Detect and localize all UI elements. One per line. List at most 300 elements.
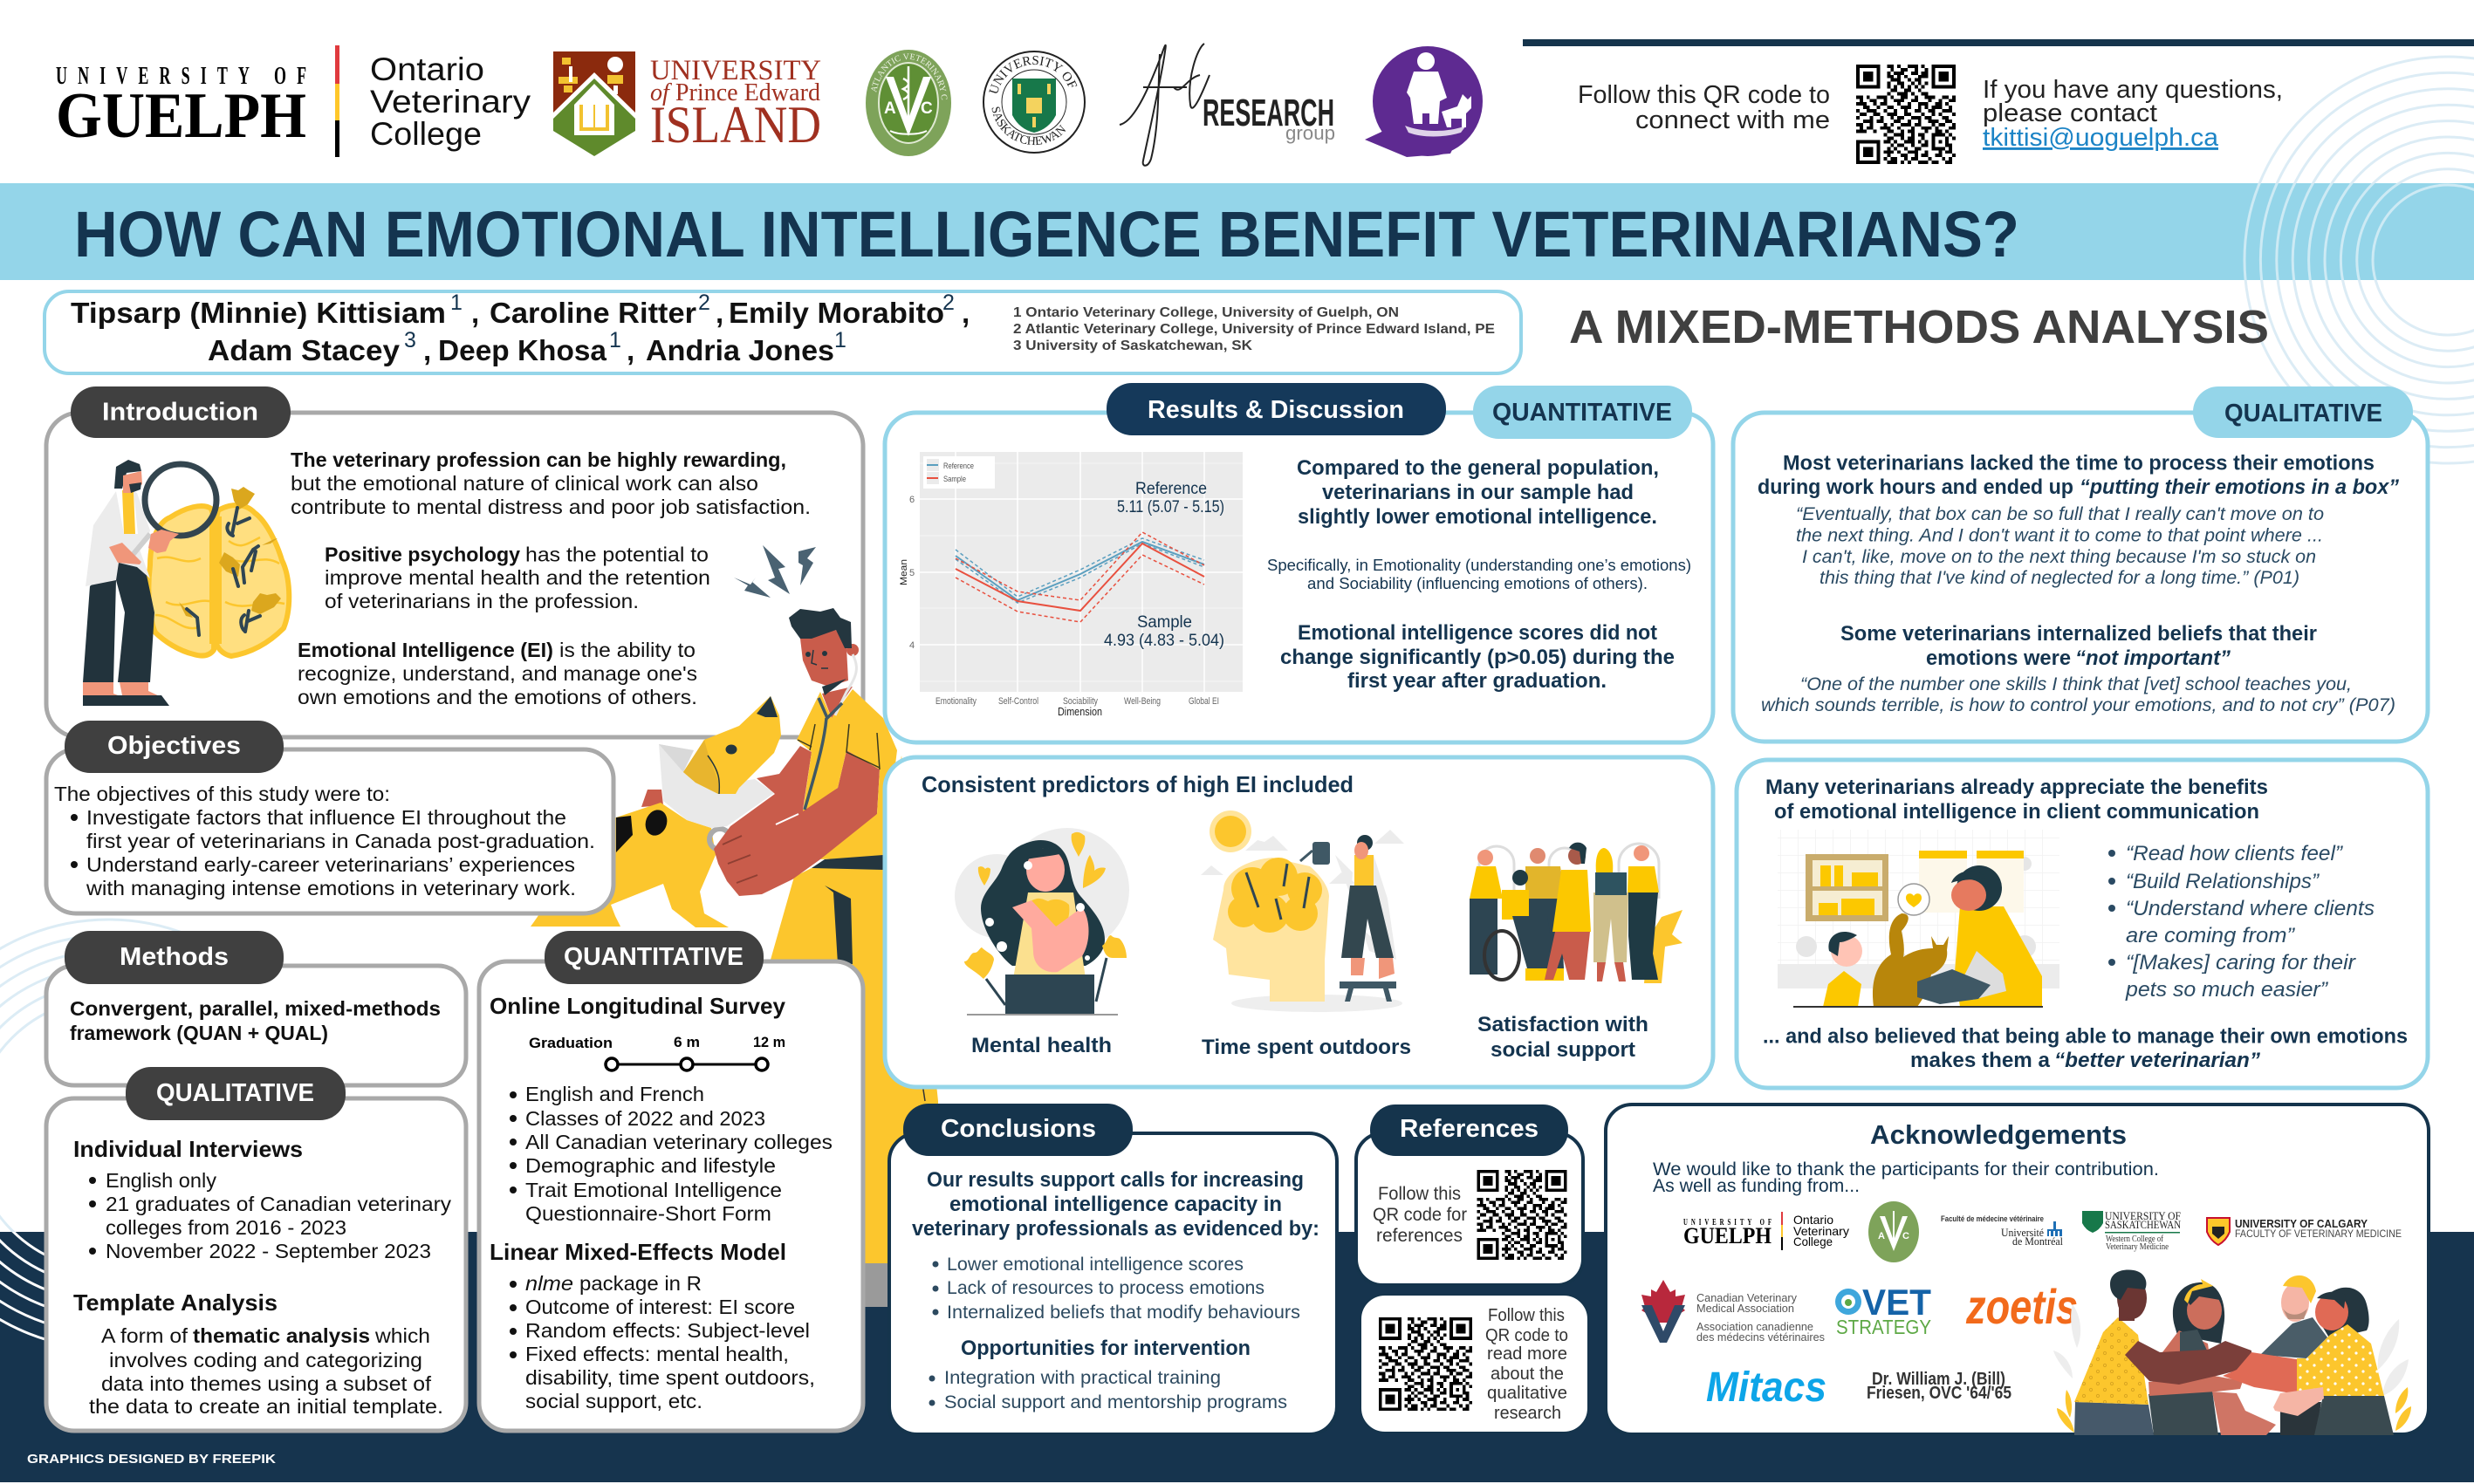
header: logo University of Saskatchewan: SASKATCHEWAN — [991, 106, 1066, 145]
logo: Université de Montréal: de Montréal — [2012, 1234, 2063, 1248]
logo: Université de Montréal: Faculté de médecine vétérinaire — [1941, 1214, 2044, 1223]
panel: methods — [46, 931, 466, 1085]
author names — [71, 291, 970, 366]
tag: qualitative — [2193, 386, 2413, 438]
logo: zoetis: zoetis — [1965, 1279, 2078, 1334]
neck and arm skin — [822, 687, 853, 718]
finding: putting emotions in a box: Most veterinarians lacked the time to process their emotions — [1783, 452, 2375, 475]
heading: consistent predictors: Consistent predictors of high EI included — [922, 771, 1354, 797]
chart axes: Global EI — [1189, 696, 1219, 707]
text: qualitative QR prompt: read more — [1487, 1344, 1567, 1364]
label: satisfaction with social support: social support — [1491, 1038, 1635, 1062]
heading: methods — [65, 931, 284, 984]
heading: client communication: Many veterinarians already appreciate the benefits — [1765, 776, 2268, 799]
heading: methods: Methods — [120, 943, 229, 971]
QR code: references — [1477, 1170, 1567, 1260]
finding: not important — [1840, 622, 2317, 670]
logo: Saskatchewan WCVM: SASKATCHEWAN — [2105, 1218, 2182, 1231]
flowers — [179, 487, 281, 618]
navy footer band — [0, 1232, 2474, 1482]
timeline: graduation to 12 months — [529, 1034, 785, 1070]
heading: results and discussion — [1107, 383, 1446, 435]
chart axes: Emotionality — [935, 696, 977, 707]
text: objectives: Understand early-career veterinarians’ experiences — [86, 853, 575, 876]
background leaves — [2053, 1304, 2409, 1396]
person one — [2074, 1402, 2154, 1435]
text: thanks: We would like to thank the participants for their contribution. — [1653, 1159, 2159, 1180]
QR prompt text: Follow this QR code to — [1578, 81, 1830, 109]
dog body — [531, 803, 729, 927]
list: client quotes: “Understand where clients — [2126, 897, 2375, 920]
text: conclusions summary: Our results support calls for increasing — [927, 1168, 1304, 1192]
text: template analysis: the data to create an initial template. — [89, 1395, 443, 1418]
illustration: team with joined hands — [2053, 1270, 2411, 1435]
logo: Guelph OVC: College — [1793, 1234, 1833, 1248]
heading: objectives: Objectives — [107, 732, 241, 760]
list: client quotes — [2108, 842, 2375, 1002]
text: template analysis: data into themes using a subset of — [101, 1372, 432, 1395]
heading: client communication: of emotional intelligence in client communication — [1774, 800, 2259, 824]
panel: predictors of EI — [885, 757, 1713, 1087]
logo: CVMA: des médecins vétérinaires — [1696, 1330, 1825, 1344]
text: thanks — [1653, 1159, 2159, 1196]
list: survey details: English and French — [525, 1083, 704, 1105]
text: individual interviews — [73, 1136, 452, 1262]
QR prompt text: connect with me — [1635, 106, 1830, 134]
header: logo University of Guelph Ontario Veterinary College — [56, 45, 531, 157]
text: methods framework: Convergent, parallel, mixed-methods — [70, 997, 441, 1020]
stress bolts — [734, 545, 816, 598]
header: logo University of Saskatchewan — [983, 51, 1086, 154]
heading: objectives — [65, 721, 284, 773]
brain — [148, 505, 289, 656]
text: qualitative QR prompt: Follow this — [1488, 1306, 1565, 1325]
heading: conclusions — [903, 1104, 1133, 1156]
panel: conclusions — [889, 1104, 1337, 1434]
arms — [2125, 1341, 2251, 1385]
author names: 1 — [834, 328, 846, 352]
text: references QR prompt — [1373, 1184, 1467, 1246]
header: logo University of Guelph Ontario Veterinary College: Ontario — [370, 51, 484, 87]
header: logo AVC crest: A — [884, 99, 896, 118]
chart legend — [923, 456, 995, 489]
list: survey details: Questionnaire-Short Form — [525, 1202, 771, 1225]
text: introduction: but the emotional nature of clinical work can also — [291, 472, 758, 495]
finding: better veterinarian: makes them a — [1910, 1049, 2051, 1072]
icon: head growing flowers with watering woman — [1201, 810, 1404, 1012]
text: quantitative findings: slightly lower emotional intelligence. — [1298, 505, 1657, 529]
finding: better veterinarian — [1763, 1024, 2408, 1072]
text: quantitative findings: veterinarians in our sample had — [1322, 481, 1634, 504]
text: methods framework: framework (QUAN + QUAL) — [70, 1022, 328, 1044]
chart annotations: 4.93 (4.83 - 5.04) — [1104, 632, 1224, 650]
quote: P01: “Eventually, that box can be so full that I really can't move on to — [1796, 504, 2324, 524]
header: logo UPEI: UNIVERSITY — [650, 55, 821, 86]
logo: Université de Montréal — [1941, 1214, 2063, 1248]
header: logo University of Guelph Ontario Veterinary College: Veterinary — [370, 84, 531, 120]
logo: CVMA — [1641, 1280, 1825, 1344]
chart annotations: 5.11 (5.07 - 5.15) — [1117, 498, 1224, 516]
text: quantitative findings: first year after graduation. — [1347, 669, 1607, 693]
authors box — [45, 291, 1521, 373]
text: qualitative QR prompt: about the — [1491, 1364, 1564, 1384]
series: sample — [956, 532, 1204, 622]
list: client quotes: pets so much easier” — [2125, 978, 2328, 1002]
chart axes: Self-Control — [998, 696, 1038, 707]
text: introduction: contribute to mental distress and poor job satisfaction. — [291, 496, 811, 518]
chart axes: Well-Being — [1124, 696, 1161, 707]
heading: introduction: Introduction — [102, 398, 258, 426]
logo: Guelph OVC — [1683, 1212, 1849, 1250]
logo: Université de Montréal: Université — [2001, 1226, 2044, 1239]
heading: quantitative — [545, 931, 764, 984]
heading: qualitative: QUALITATIVE — [156, 1079, 314, 1107]
stethoscope — [835, 654, 856, 715]
list: survey details: Classes of 2022 and 2023 — [525, 1107, 765, 1130]
list: model details: Fixed effects: mental health, — [525, 1343, 789, 1365]
belt — [812, 855, 883, 870]
author names: , — [471, 297, 479, 329]
text: quantitative findings — [1267, 456, 1691, 693]
timeline: graduation to 12 months: 12 m — [753, 1034, 785, 1050]
icon: woman hugging heart — [955, 828, 1129, 1015]
panel: introduction — [46, 386, 863, 737]
text: introduction: own emotions and the emotions of others. — [298, 686, 697, 708]
text: quantitative findings: Emotional intelligence scores did not — [1298, 621, 1657, 645]
text: introduction: The veterinary profession can be highly rewarding, — [291, 448, 786, 471]
logo: Saskatchewan WCVM: UNIVERSITY OF — [2105, 1209, 2181, 1222]
person three — [2280, 1402, 2321, 1435]
list: opportunities — [929, 1368, 1287, 1412]
text: individual interviews: Individual Interviews — [73, 1136, 303, 1162]
text: references QR prompt: Follow this — [1378, 1184, 1461, 1204]
author names: 3 — [404, 328, 416, 352]
list: evidence: Lack of resources to process emotions — [947, 1278, 1264, 1298]
contact text: tkittisi@uoguelph.ca — [1983, 124, 2219, 152]
header: logo research group signature: group — [1285, 122, 1335, 144]
text: template analysis: A form of — [101, 1324, 188, 1347]
text: Dr. William J. (Bill) Friesen — [1867, 1370, 2011, 1403]
list: model details: disability, time spent outdoors, — [525, 1366, 815, 1389]
text: references QR prompt: QR code for — [1373, 1205, 1467, 1225]
illustration: veterinarian with dog — [531, 545, 938, 1307]
text: Dr. William J. (Bill) Friesen: Friesen, OVC '64/'65 — [1867, 1384, 2011, 1403]
header: logo University of Guelph Ontario Veterinary College: College — [370, 116, 482, 152]
text: quantitative findings: Compared to the general population, — [1297, 456, 1659, 480]
author names: Adam Stacey — [208, 334, 401, 366]
affiliations: 2 Atlantic Veterinary College, University of Prince Edward Island, PE — [1013, 322, 1495, 337]
logo: Mitacs: Mitacs — [1706, 1364, 1826, 1411]
logo: CVMA: Medical Association — [1696, 1302, 1794, 1315]
finding: not important: “not important” — [2075, 646, 2231, 670]
header: logo UPEI: of Prince Edward — [650, 79, 820, 106]
text: introduction — [291, 448, 811, 708]
list: model details: social support, etc. — [525, 1390, 702, 1412]
finding: not important: Some veterinarians internalized beliefs that their — [1840, 622, 2317, 646]
contact text — [1983, 76, 2283, 152]
timeline: graduation to 12 months: Graduation — [529, 1035, 613, 1051]
list: client quotes: “[Makes] caring for their — [2126, 951, 2356, 975]
author names: , — [627, 334, 634, 366]
logo: AVC: C — [1902, 1231, 1909, 1241]
text: introduction: improve mental health and the retention — [325, 566, 710, 589]
text: introduction: Positive psychology — [325, 543, 520, 565]
author names: , — [962, 297, 970, 329]
text: qualitative QR prompt: qualitative — [1487, 1384, 1567, 1403]
text: quantitative findings: Specifically, in Emotionality (understanding one’s emotions) — [1267, 557, 1691, 574]
text: introduction: Emotional Intelligence (EI) — [298, 639, 553, 661]
logo: Guelph OVC: Veterinary — [1793, 1224, 1849, 1238]
author names: 1 — [609, 328, 621, 352]
logo: Saskatchewan WCVM: Veterinary Medicine — [2106, 1242, 2169, 1252]
heading: references: References — [1400, 1115, 1539, 1143]
author names: 2 — [698, 291, 710, 315]
chart axes: Dimension — [1058, 705, 1102, 718]
text: introduction: is the ability to — [559, 639, 696, 661]
logo: CVMA: Association canadienne — [1696, 1320, 1813, 1333]
contact block — [1578, 65, 2283, 164]
text: conclusions summary — [912, 1168, 1319, 1241]
list: client quotes: “Read how clients feel” — [2126, 842, 2343, 865]
heading: quantitative: QUANTITATIVE — [564, 943, 744, 971]
tag: qualitative: QUALITATIVE — [2224, 400, 2382, 427]
text: conclusions summary: veterinary professionals as evidenced by: — [912, 1217, 1319, 1241]
text: introduction: recognize, understand, and manage one's — [298, 662, 697, 685]
cone — [659, 744, 774, 828]
quote: P07 — [1761, 674, 2395, 715]
header: logo UPEI: ISLAND — [650, 96, 821, 154]
panel: results quantitative — [885, 383, 1713, 742]
list: evidence — [932, 1255, 1300, 1323]
affiliations: 3 University of Saskatchewan, SK — [1013, 339, 1252, 353]
list: evidence: Lower emotional intelligence scores — [947, 1255, 1244, 1275]
text: qualitative QR prompt: research — [1494, 1404, 1561, 1423]
list: model details: package in R — [579, 1272, 702, 1295]
text: template analysis: thematic analysis — [193, 1324, 370, 1347]
contact text: please contact — [1983, 99, 2157, 127]
tag: quantitative: QUANTITATIVE — [1492, 399, 1672, 427]
logo: Saskatchewan WCVM: Western College of — [2106, 1234, 2164, 1244]
text: online longitudinal survey: Online Longitudinal Survey — [490, 993, 786, 1019]
text: objectives — [54, 783, 595, 899]
chart axes: Mean — [899, 559, 909, 585]
header: logo AVC crest: C — [921, 99, 933, 118]
logo: University of Calgary: UNIVERSITY OF CALGARY — [2235, 1217, 2368, 1230]
author names: Deep Khosa — [438, 334, 607, 366]
chart legend: Sample — [943, 475, 966, 483]
panel: methods qualitative — [46, 1067, 466, 1431]
panel: results qualitative — [1733, 386, 2428, 742]
subtitle: A MIXED-METHODS ANALYSIS — [1569, 301, 2269, 353]
author names: , — [716, 297, 723, 329]
tag: quantitative — [1473, 386, 1692, 439]
header: logo research group signature: RESEARCH — [1203, 92, 1334, 134]
logo: AVC — [1868, 1201, 1919, 1262]
logo: Saskatchewan WCVM — [2082, 1209, 2182, 1252]
chart axes: Sociability — [1063, 696, 1098, 707]
logo: Guelph OVC: GUELPH — [1683, 1223, 1772, 1248]
panel: acknowledgements — [1606, 1104, 2429, 1435]
chart axes — [899, 495, 1219, 718]
person two — [2173, 1282, 2224, 1344]
list: opportunities: Integration with practical training — [944, 1368, 1221, 1388]
author names: 1 — [450, 291, 463, 315]
list: model details: Random effects: Subject-level — [525, 1319, 810, 1342]
chart annotations: Sample — [1137, 613, 1192, 632]
header navy rule — [1523, 39, 2474, 46]
quote: P01 — [1796, 504, 2324, 588]
text: quantitative findings: change significantly (p>0.05) during the — [1280, 646, 1675, 669]
contact text: If you have any questions, — [1983, 76, 2283, 104]
header: logo AVC crest — [866, 50, 951, 156]
text: template analysis — [73, 1289, 443, 1418]
list: client quotes: are coming from” — [2126, 924, 2295, 947]
logo: Guelph OVC: Ontario — [1793, 1213, 1833, 1227]
text: individual interviews: November 2022 - September 2023 — [106, 1240, 431, 1262]
quote: P01: the next thing. And I don't want it to come to that point where ... — [1796, 525, 2323, 546]
list: model details — [510, 1272, 815, 1412]
label: satisfaction with social support — [1477, 1013, 1648, 1062]
text: individual interviews: colleges from 2016 - 2023 — [106, 1216, 346, 1239]
heading: qualitative — [126, 1067, 346, 1120]
list: survey details: Demographic and lifestyle — [525, 1154, 776, 1177]
quote: P07: which sounds terrible, is how to control your emotions, and to not cry” (P07) — [1761, 695, 2395, 715]
affiliations — [1013, 305, 1495, 353]
text: objectives: Investigate factors that influence EI throughout the — [86, 806, 566, 829]
finding: not important: emotions were — [1926, 646, 2071, 670]
text: introduction: has the potential to — [525, 543, 709, 565]
shoe — [777, 1263, 887, 1307]
header: logo University of Saskatchewan: UNIVERSITY OF — [989, 56, 1077, 93]
chart annotations: Reference — [1135, 480, 1207, 498]
logo: Guelph OVC: UNIVERSITY OF — [1683, 1216, 1772, 1227]
icon: scientist with magnifier and brain — [83, 460, 289, 706]
finding: putting emotions in a box: “putting their emotions in a box” — [2080, 475, 2399, 499]
logo: University of Calgary: FACULTY OF VETERINARY MEDICINE — [2235, 1228, 2402, 1240]
chart axes: 5 — [909, 568, 915, 578]
heading: references — [1370, 1104, 1568, 1156]
heading: results and discussion: Results & Discussion — [1148, 396, 1404, 424]
finding: better veterinarian: “better veterinarian” — [2054, 1049, 2260, 1072]
panel: references — [1356, 1104, 1583, 1285]
heading: conclusions: Conclusions — [941, 1115, 1096, 1143]
text: references QR prompt: references — [1376, 1226, 1463, 1246]
panel: qualitative research QR — [1360, 1295, 1588, 1433]
logo: VET Strategy — [1835, 1282, 1931, 1338]
header: logo research group signature — [1120, 44, 1335, 166]
finding: putting emotions in a box: during work hours and ended up — [1758, 475, 2073, 499]
heading: acknowledgements: Acknowledgements — [1870, 1119, 2127, 1150]
series: reference — [956, 538, 1204, 603]
label: time spent outdoors: Time spent outdoors — [1202, 1036, 1411, 1059]
header: logo University of Guelph Ontario Veterinary College: GUELPH — [56, 80, 306, 152]
QR code: qualitative research — [1379, 1317, 1472, 1411]
panel: methods quantitative — [479, 931, 863, 1431]
chart legend: Reference — [943, 462, 974, 470]
author names: , — [423, 334, 431, 366]
text: quantitative findings: and Sociability (influencing emotions of others). — [1307, 575, 1648, 592]
list: survey details: Trait Emotional Intelligence — [525, 1179, 782, 1201]
panel: client communication — [1737, 760, 2428, 1088]
finding: better veterinarian: ... and also believed that being able to manage their own emotions — [1763, 1024, 2408, 1049]
credit: GRAPHICS DESIGNED BY FREEPIK — [27, 1452, 276, 1467]
shirt — [797, 689, 897, 859]
person four — [2314, 1396, 2394, 1435]
text: template analysis: Template Analysis — [73, 1289, 278, 1316]
list: survey details — [510, 1083, 833, 1225]
heading: client communication — [1765, 776, 2268, 824]
list: client quotes: “Build Relationships” — [2126, 870, 2320, 893]
label: mental health: Mental health — [971, 1034, 1112, 1057]
label: satisfaction with social support: Satisfaction with — [1477, 1013, 1648, 1036]
text: Dr. William J. (Bill) Friesen: Dr. William J. (Bill) — [1872, 1370, 2005, 1389]
text: thanks: As well as funding from... — [1653, 1176, 1860, 1196]
text: individual interviews: 21 graduates of Canadian veterinary — [106, 1193, 452, 1215]
heading: opportunities: Opportunities for intervention — [961, 1337, 1251, 1360]
logo: AVC: A — [1878, 1231, 1885, 1241]
logo: VET Strategy: VET — [1862, 1282, 1931, 1323]
text: objectives: The objectives of this study were to: — [54, 783, 390, 805]
chart axes: 6 — [909, 495, 915, 505]
QR prompt text — [1578, 81, 1830, 134]
icon: vet with cat and child — [1778, 830, 2059, 1007]
logo: CVMA: Canadian Veterinary — [1696, 1291, 1797, 1304]
text: template analysis: involves coding and categorizing — [109, 1349, 422, 1371]
text: conclusions summary: emotional intelligence capacity in — [949, 1193, 1282, 1216]
line chart: emotional intelligence by dimension — [899, 452, 1243, 718]
person — [83, 563, 154, 682]
text: qualitative QR prompt: QR code to — [1485, 1326, 1568, 1345]
header: logo purple circle with farmer and calf — [1365, 46, 1483, 157]
list: model details: nlme — [525, 1272, 573, 1295]
icon: group of people — [1470, 843, 1682, 983]
author names: Tipsarp (Minnie) Kittisiam — [71, 297, 446, 329]
chart axes: 4 — [909, 640, 915, 651]
text: linear mixed-effects model: Linear Mixed-Effects Model — [490, 1239, 786, 1265]
list: survey details: All Canadian veterinary colleges — [525, 1131, 833, 1153]
title band: HOW CAN EMOTIONAL INTELLIGENCE BENEFIT VETERINARIANS? — [74, 198, 2019, 270]
author names: Caroline Ritter — [490, 297, 696, 329]
affiliations: 1 Ontario Veterinary College, University of Guelph, ON — [1013, 305, 1399, 320]
paw — [641, 790, 663, 807]
title band — [0, 183, 2474, 280]
text: template analysis: which — [374, 1324, 430, 1347]
quote: P01: I can't, like, move on to the next thing because I'm so stuck on — [1802, 547, 2316, 567]
text: methods framework — [70, 997, 441, 1044]
QR code: connect — [1856, 65, 1956, 164]
list: evidence: Internalized beliefs that modify behaviours — [947, 1303, 1300, 1323]
chart annotations — [1104, 480, 1224, 650]
text: individual interviews: English only — [106, 1169, 216, 1192]
trousers — [771, 756, 938, 1263]
author names: Andria Jones — [646, 334, 834, 366]
author names: 2 — [942, 291, 955, 315]
text: introduction: of veterinarians in the profession. — [325, 590, 639, 612]
text: objectives: first year of veterinarians in Canada post-graduation. — [86, 830, 595, 852]
list: model details: Outcome of interest: EI score — [525, 1296, 795, 1318]
finding: putting emotions in a box — [1758, 452, 2399, 499]
panel: objectives — [46, 721, 613, 913]
quote: P07: “One of the number one skills I think that [vet] school teaches you, — [1800, 674, 2352, 694]
timeline: graduation to 12 months: 6 m — [674, 1034, 700, 1050]
list: opportunities: Social support and mentorship programs — [944, 1392, 1287, 1412]
dog head — [683, 696, 781, 794]
text: objectives: with managing intense emotions in veterinary work. — [86, 877, 576, 899]
header: logo University of Guelph Ontario Veterinary College: UNIVERSITY OF — [56, 63, 306, 90]
logo: University of Calgary — [2207, 1217, 2402, 1245]
head — [800, 630, 848, 687]
text: qualitative QR prompt — [1485, 1306, 1568, 1423]
